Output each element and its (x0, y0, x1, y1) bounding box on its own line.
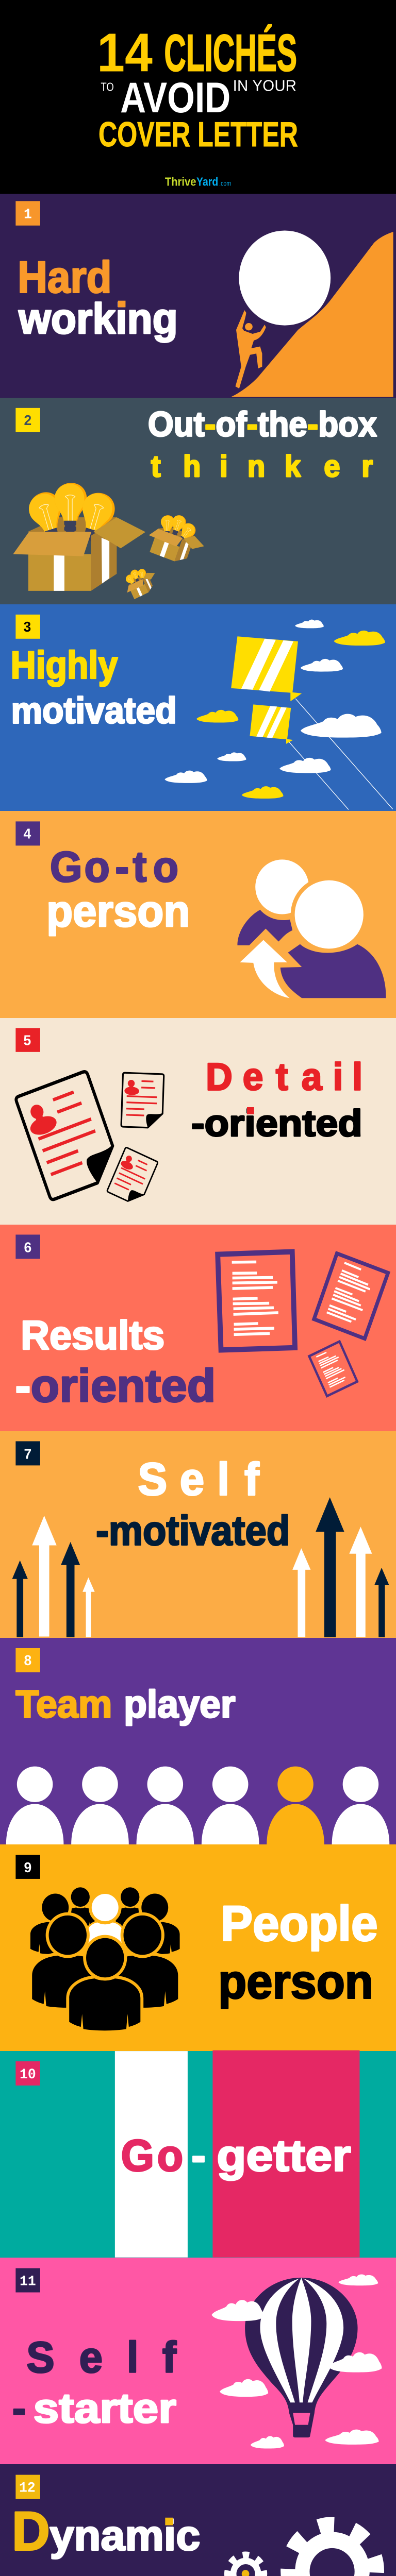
badge 9 (15, 1855, 40, 1879)
title: 14 (97, 22, 153, 83)
panel 11: Self-starter (0, 2258, 396, 2464)
heading: Highly motivated: Highly (11, 643, 118, 687)
icon: boulder on a hill with climber (231, 230, 393, 397)
heading: Highly motivated (11, 643, 177, 731)
badge 4: 4 (24, 826, 31, 842)
heading: People person: person (218, 1955, 373, 2009)
badge 11 (15, 2268, 40, 2292)
heading: Team player: Team (15, 1682, 112, 1726)
panel 10: Go-getter (0, 2050, 396, 2258)
panel 9: People person (0, 1844, 396, 2051)
heading: Results-oriented: -oriented (15, 1360, 216, 1412)
heading: Go-to person: Go-to (50, 843, 178, 891)
badge 3 (15, 615, 40, 639)
heading: Go-to person: person (46, 886, 190, 936)
panel 6: Results-oriented (0, 1225, 396, 1431)
heading: Hard working: Hard (18, 252, 111, 302)
heading: People person (218, 1896, 378, 2009)
header panel (0, 0, 396, 194)
heading: Out-of-the-box thinker: Out-of-the-box (148, 404, 377, 444)
heading: Detail-oriented: Detail (206, 1056, 362, 1098)
heading: Hard working: working (18, 295, 178, 343)
badge 8: 8 (24, 1653, 31, 1668)
title (97, 22, 298, 154)
panel 8: Team player (0, 1638, 396, 1844)
badge 12 (15, 2475, 40, 2499)
logo: ThriveYard: .com (219, 179, 231, 188)
panel 1: Hard working (0, 194, 396, 398)
badge 5 (15, 1028, 40, 1052)
heading: Go-getter (121, 2130, 351, 2180)
heading: Hard working (18, 252, 178, 343)
heading: Dynamic: D (12, 2501, 50, 2562)
title: COVER LETTER (98, 115, 298, 154)
badge 8 (15, 1648, 40, 1672)
heading: Team player (15, 1682, 235, 1726)
heading: Self-starter (12, 2333, 176, 2431)
heading: Self-motivated: Self (138, 1454, 260, 1505)
icon: row of people (6, 1767, 389, 1844)
panel 2: Out-of-the-box thinker (0, 398, 396, 604)
heading: Out-of-the-box thinker (148, 404, 377, 483)
icon: kites and clouds (164, 620, 393, 809)
icon: framed documents (218, 1251, 390, 1397)
title: AVOID (120, 74, 230, 122)
heading: Self-starter: Self (26, 2333, 176, 2382)
heading: Go-getter: Go (121, 2130, 183, 2180)
badge 5: 5 (24, 1032, 31, 1048)
badge 7: 7 (24, 1446, 31, 1462)
heading: Out-of-the-box thinker: thinker (151, 450, 373, 483)
icon: two people with arrow (237, 859, 386, 998)
badge 2: 2 (24, 413, 31, 428)
badge 1: 1 (24, 207, 32, 223)
heading: Self-motivated (96, 1454, 290, 1554)
heading: Self-motivated: -motivated (96, 1507, 290, 1554)
heading: Go-getter: getter (217, 2130, 351, 2180)
badge 1 (15, 201, 40, 226)
heading: Team player: player (124, 1682, 235, 1726)
badge 10: 10 (20, 2067, 36, 2083)
icon: gears (225, 2509, 391, 2576)
heading: Dynamic: ynamic (50, 2512, 200, 2560)
panel 5: Detail-oriented (0, 1018, 396, 1225)
title: CLICHÉS (164, 24, 297, 82)
badge 3: 3 (24, 619, 31, 635)
logo: ThriveYard (165, 175, 231, 189)
badge 2 (15, 408, 40, 432)
title: IN YOUR (233, 77, 296, 95)
heading: Go-getter: - (191, 2130, 206, 2180)
heading: Detail-oriented: -oriented (191, 1103, 362, 1144)
badge 9: 9 (24, 1860, 31, 1875)
heading: Dynamic (12, 2501, 200, 2562)
heading: Self-starter: starter (34, 2385, 176, 2431)
icon: group of people (30, 1887, 180, 2030)
heading: Results-oriented: Results (21, 1313, 164, 1358)
badge 7 (15, 1441, 40, 1465)
panel 7: Self-motivated (0, 1431, 396, 1638)
badge 4 (15, 821, 40, 845)
logo: ThriveYard: Thrive (165, 175, 196, 189)
icon: resume documents (15, 1071, 164, 1207)
icon: upward arrows (12, 1497, 389, 1637)
title: TO (101, 80, 114, 94)
heading: Self-starter: - (12, 2385, 26, 2431)
heading: Highly motivated: motivated (11, 690, 177, 731)
panel 4: Go-to person (0, 811, 396, 1018)
icon: hot air balloon and clouds (211, 2274, 382, 2449)
badge 12: 12 (19, 2481, 36, 2497)
badge 11: 11 (20, 2274, 36, 2290)
heading: Detail-oriented (191, 1056, 362, 1144)
badge 6: 6 (24, 1240, 31, 1256)
badge 6 (15, 1234, 40, 1259)
heading: People person: People (221, 1896, 378, 1952)
panel 12: Dynamic (0, 2464, 396, 2576)
panel 3: Highly motivated (0, 604, 396, 811)
logo: ThriveYard: Yard (196, 175, 218, 189)
heading: Go-to person (46, 843, 190, 936)
icon: open boxes with light bulbs (13, 483, 211, 601)
heading: Results-oriented (15, 1313, 216, 1412)
badge 10 (15, 2061, 40, 2086)
